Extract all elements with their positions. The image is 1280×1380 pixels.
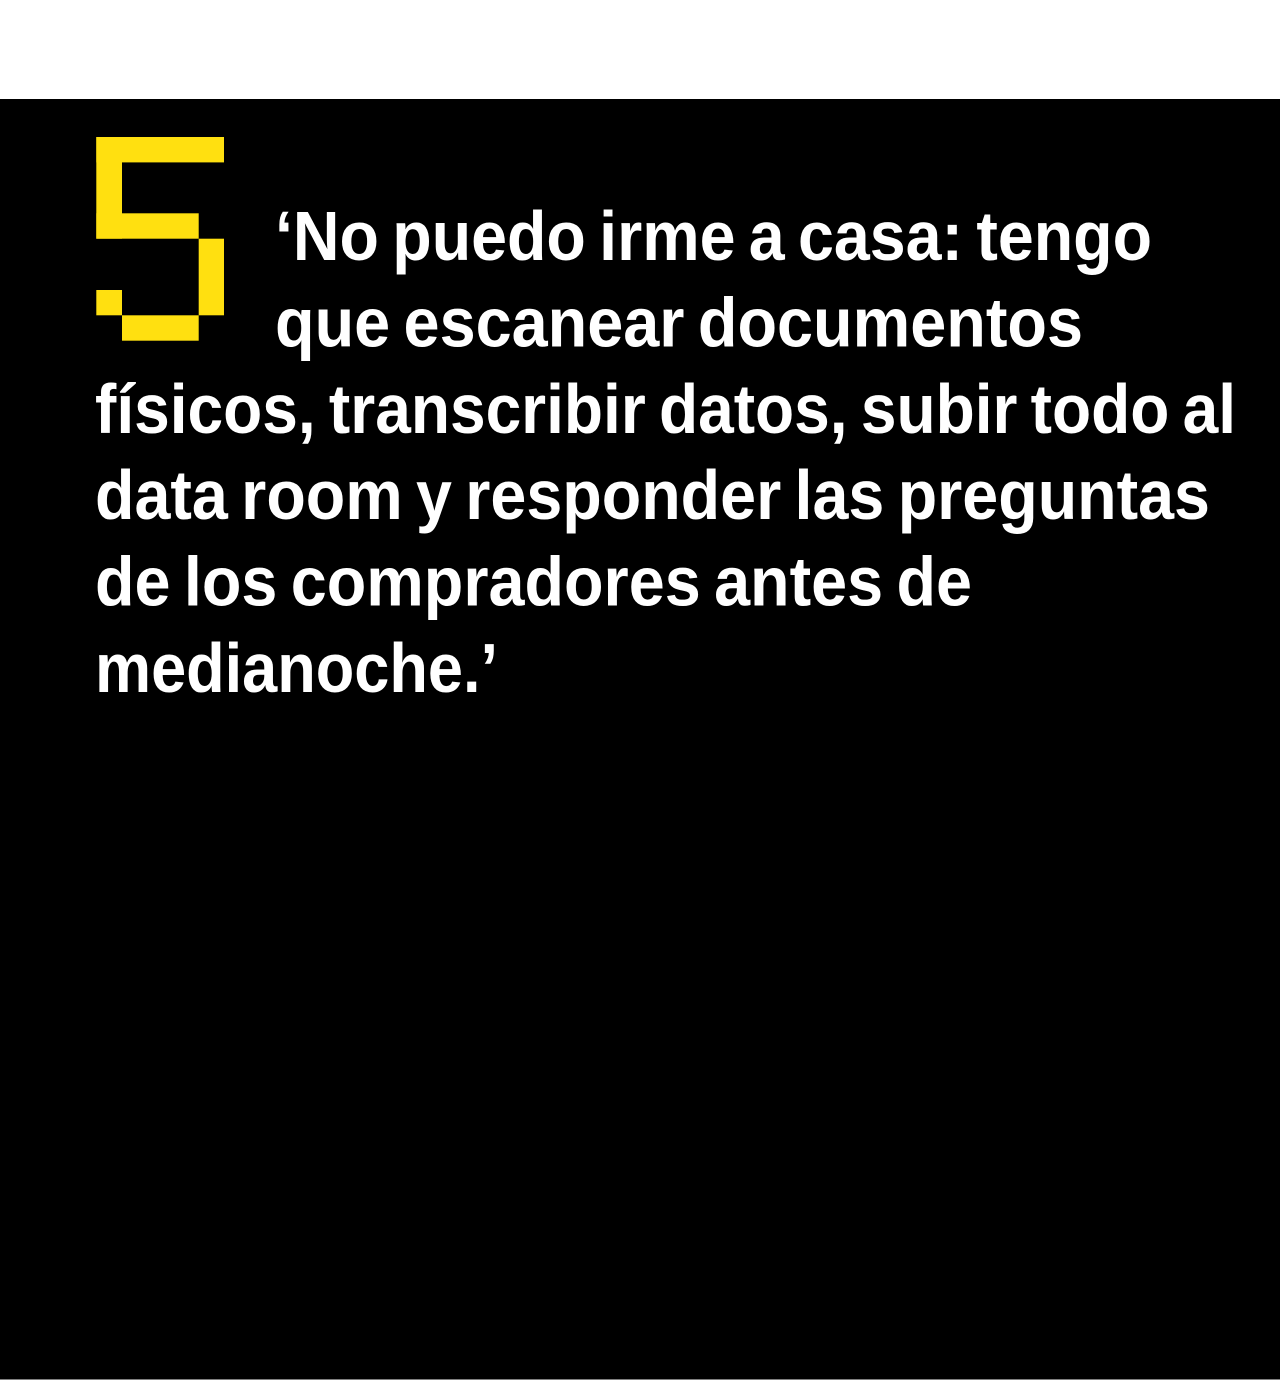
quote text: que escanear documentos — [275, 283, 1083, 361]
quote text: ‘No puedo irme a casa: tengo — [275, 197, 1152, 275]
quote text: medianoche.’ — [95, 629, 498, 707]
quote text: data room y responder las preguntas — [95, 456, 1210, 534]
quote text: de los compradores antes de — [95, 543, 972, 621]
icon: pixel numeral 5 — [96, 137, 224, 341]
quote text — [95, 197, 1236, 707]
